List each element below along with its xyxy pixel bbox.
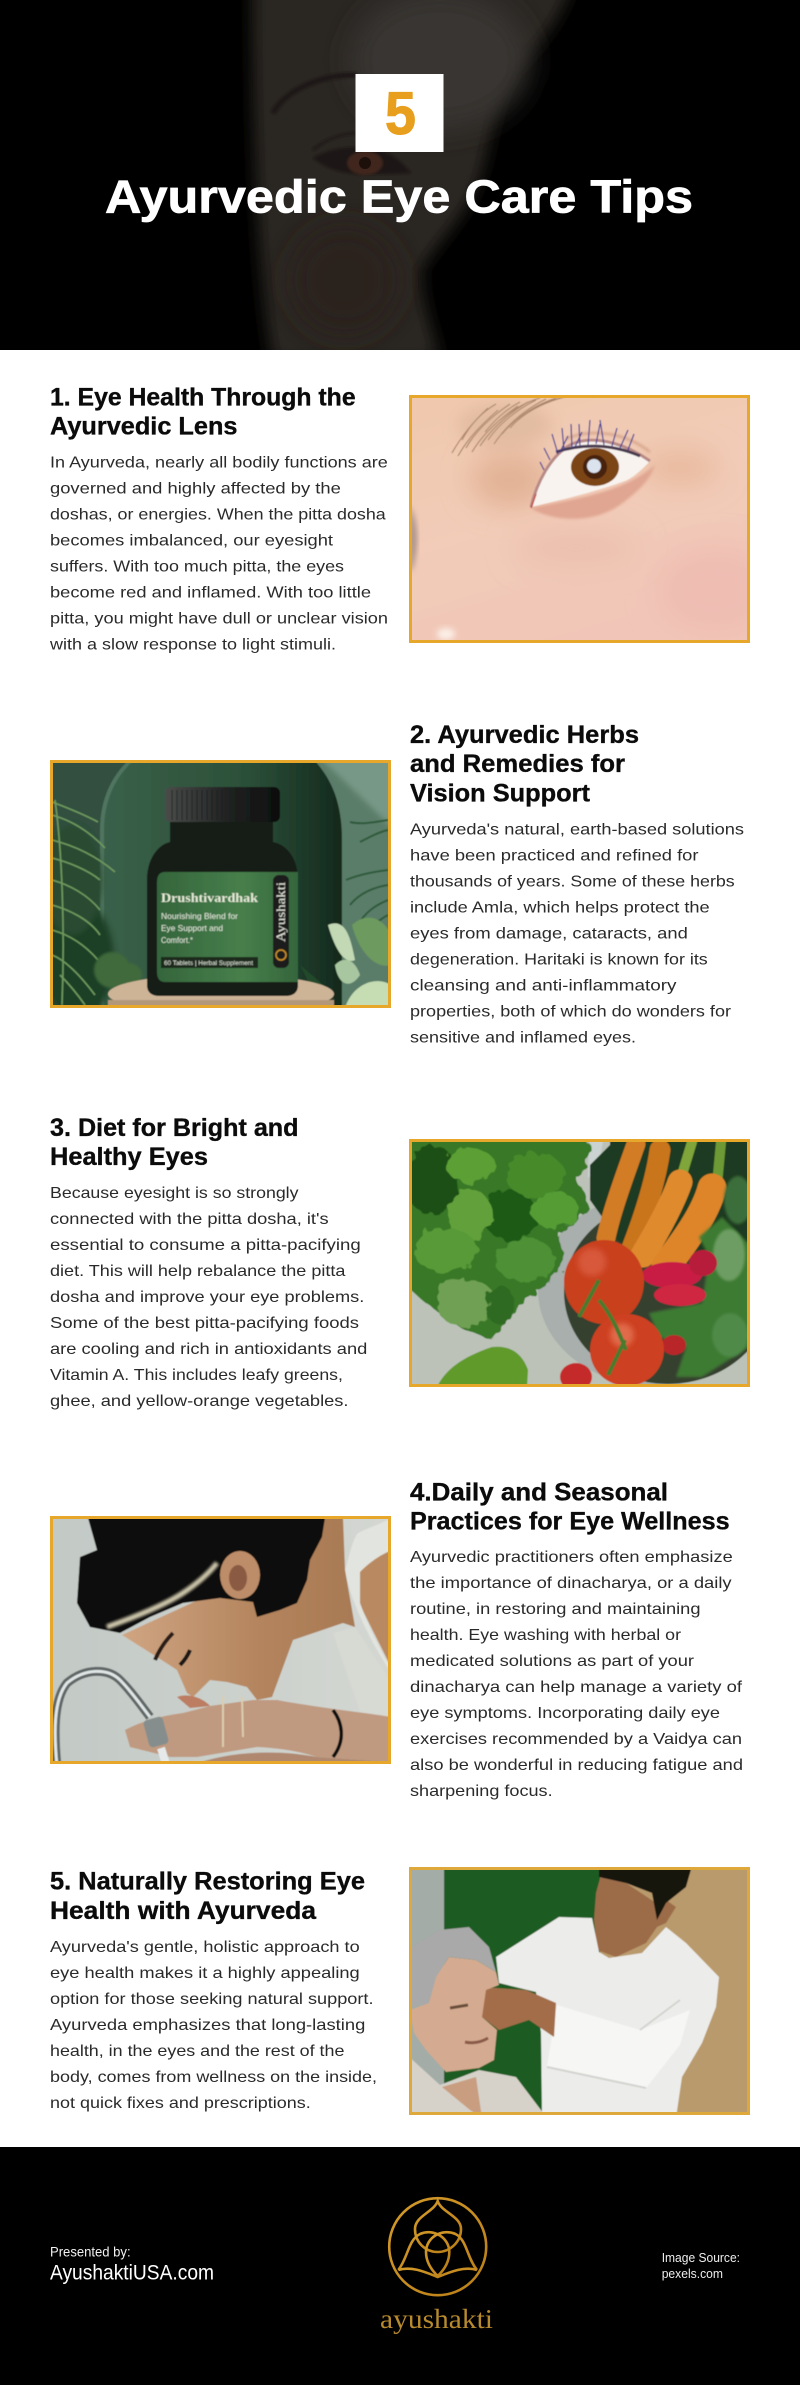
number badge: [356, 74, 444, 152]
heading 2: 2. Ayurvedic Herbs: [410, 721, 639, 749]
image: woman washing her face: [45, 1510, 395, 1770]
text block 5: Ayurveda's gentle, holistic approach to: [50, 1939, 360, 1956]
patient face: [410, 1957, 499, 2072]
bottle: [147, 822, 298, 996]
hair: [77, 1518, 325, 1633]
hand and arm: [125, 1700, 392, 1762]
text block 4: medicated solutions as part of your: [410, 1653, 695, 1670]
heading 2: and Remedies for: [410, 750, 625, 778]
text block 1: pitta, you might have dull or unclear vision: [50, 610, 388, 628]
bowl: [538, 1208, 678, 1384]
bottle label: Eye Support and: [161, 923, 223, 933]
bottle label: Ayushakti: [273, 882, 288, 942]
text block 2: [410, 821, 744, 1046]
heading 4: [410, 1478, 730, 1536]
carrots: [606, 1142, 721, 1266]
text block 5: health, in the eyes and the rest of the: [50, 2043, 345, 2060]
text block 3: diet. This will help rebalance the pitta: [50, 1263, 346, 1280]
text block 2: thousands of years. Some of these herbs: [410, 873, 735, 890]
text block 3: connected with the pitta dosha, it's: [50, 1211, 329, 1228]
text block 4: sharpening focus.: [410, 1783, 553, 1800]
panel: section 3: [50, 1114, 772, 1410]
faucet: [55, 1671, 150, 1766]
text block 3: [50, 1185, 367, 1410]
text block 3: ghee, and yellow-orange vegetables.: [50, 1393, 348, 1410]
practitioner face: [594, 1875, 676, 1957]
heading 3: [50, 1114, 298, 1171]
heading 1: [50, 384, 356, 440]
text block 5: Ayurveda emphasizes that long-lasting: [50, 2017, 365, 2034]
heading 2: [410, 721, 639, 808]
text block 3: are cooling and rich in antioxidants and: [50, 1341, 367, 1358]
presented by: Presented by:: [50, 2244, 131, 2260]
presented by: [50, 2244, 214, 2284]
lower lid and under-eye bag: [531, 465, 655, 519]
image: close-up of eye: [409, 395, 750, 643]
footer: [0, 2147, 800, 2385]
heading 1: 1. Eye Health Through the: [50, 384, 356, 412]
wooden pedestal: [107, 978, 335, 1000]
tomatoes: [560, 1240, 664, 1391]
text block 2: properties, both of which do wonders for: [410, 1003, 732, 1020]
text block 4: Ayurvedic practitioners often emphasize: [410, 1549, 733, 1566]
ear: [220, 1551, 260, 1599]
text block 1: become red and inflamed. With too little: [50, 584, 371, 602]
text block 3: Because eyesight is so strongly: [50, 1185, 298, 1202]
text block 4: exercises recommended by a Vaidya can: [410, 1731, 742, 1748]
heading 4: Practices for Eye Wellness: [410, 1508, 730, 1536]
text block 5: [50, 1939, 377, 2112]
header banner: [0, 0, 800, 360]
bottle label: [157, 872, 298, 982]
text block 3: Some of the best pitta-pacifying foods: [50, 1315, 359, 1332]
text block 5: not quick fixes and prescriptions.: [50, 2095, 311, 2112]
image: vegetables: [409, 1139, 750, 1387]
heading 1: Ayurvedic Lens: [50, 412, 238, 440]
text block 5: body, comes from wellness on the inside,: [50, 2069, 377, 2086]
heading 4: 4.Daily and Seasonal: [410, 1478, 668, 1506]
number badge: 5: [385, 80, 416, 147]
white strap: [345, 1520, 388, 1668]
text block 5: option for those seeking natural support.: [50, 1991, 374, 2008]
radishes: [642, 1250, 717, 1355]
text block 4: dinacharya can help manage a variety of: [410, 1679, 743, 1696]
text block 1: with a slow response to light stimuli.: [49, 636, 336, 654]
heading 5: Health with Ayurveda: [50, 1897, 317, 1925]
presented by: AyushaktiUSA.com: [50, 2262, 214, 2284]
text block 1: becomes imbalanced, our eyesight: [50, 532, 334, 550]
text block 2: have been practiced and refined for: [410, 847, 699, 864]
iris: [571, 448, 619, 486]
bottle label: Drushtivardhak: [161, 890, 259, 905]
fist and wrist: [482, 1987, 556, 2037]
text block 2: degeneration. Haritaki is known for its: [410, 951, 708, 968]
heading 3: 3. Diet for Bright and: [50, 1114, 298, 1142]
text block 3: Vitamin A. This includes leafy greens,: [50, 1367, 343, 1384]
left foliage: [53, 909, 116, 1005]
image: practitioner treating patient: [405, 1862, 755, 2120]
patient shirt: [405, 2053, 547, 2118]
text block 4: also be wonderful in reducing fatigue and: [410, 1757, 743, 1774]
text block 1: governed and highly affected by the: [50, 480, 341, 498]
text block 3: dosha and improve your eye problems.: [50, 1289, 364, 1306]
lashes: [540, 420, 634, 470]
bottle label: 60 Tablets | Herbal Supplement: [164, 961, 253, 967]
text block 1: suffers. With too much pitta, the eyes: [50, 558, 344, 576]
panel: section 4: [45, 1478, 743, 1800]
image: supplement bottle: [42, 755, 395, 1020]
bottle label: Nourishing Blend for: [161, 911, 238, 921]
header background: shadowed face: [252, 0, 575, 360]
title: Ayurvedic Eye Care Tips: [105, 170, 693, 222]
avocado: [437, 1347, 528, 1387]
neck and face: [122, 1518, 355, 1700]
text block 4: routine, in restoring and maintaining: [410, 1601, 700, 1618]
right arm skin: [360, 1551, 388, 1662]
heading 3: Healthy Eyes: [50, 1143, 208, 1171]
panel: section 5: [50, 1862, 755, 2120]
right foliage: [346, 818, 388, 922]
text block 5: eye health makes it a highly appealing: [50, 1965, 360, 1982]
bottle label: Comfort.*: [161, 935, 194, 945]
text block 2: Ayurveda's natural, earth-based solutions: [410, 821, 744, 838]
text block 3: essential to consume a pitta-pacifying: [50, 1237, 361, 1254]
text block 2: eyes from damage, cataracts, and: [410, 925, 688, 942]
icon: ayushakti logo: [389, 2198, 486, 2295]
text block 2: cleansing and anti-inflammatory: [410, 977, 676, 994]
text block 4: eye symptoms. Incorporating daily eye: [410, 1705, 720, 1722]
practitioner hair: [599, 1866, 692, 1920]
eyebrow and eye: [155, 1633, 173, 1660]
white coat: [496, 1917, 719, 2118]
heading 5: 5. Naturally Restoring Eye: [50, 1868, 365, 1896]
logo wordmark: ayushakti: [380, 2304, 493, 2334]
text block 2: sensitive and inflamed eyes.: [410, 1029, 636, 1046]
lettuce: [404, 1135, 591, 1340]
text block 4: [410, 1549, 743, 1800]
text block 1: doshas, or energies. When the pitta dosha: [50, 506, 386, 524]
text block 1: In Ayurveda, nearly all bodily functions are: [50, 454, 388, 472]
image source: pexels.com: [662, 2267, 723, 2281]
heading 2: Vision Support: [410, 780, 591, 808]
brow hairs: [452, 397, 565, 456]
bracelet: [333, 1710, 341, 1757]
text block 4: health. Eye washing with herbal or: [410, 1627, 682, 1644]
eye white and lid: [531, 440, 650, 507]
white top lower: [333, 1627, 392, 1720]
right greens: [649, 1217, 755, 1377]
image source: [662, 2251, 740, 2281]
image source: Image Source:: [662, 2251, 740, 2265]
water: [223, 1697, 243, 1747]
panel: section 2: [42, 721, 744, 1046]
text block 2: include Amla, which helps protect the: [410, 899, 710, 916]
hair highlight: [107, 1563, 217, 1627]
text block 4: the importance of dinacharya, or a daily: [410, 1575, 732, 1592]
panel: section 1: [49, 384, 775, 654]
heading 5: [50, 1868, 365, 1925]
patient hair: [408, 1927, 496, 2008]
text block 1: [49, 454, 388, 654]
